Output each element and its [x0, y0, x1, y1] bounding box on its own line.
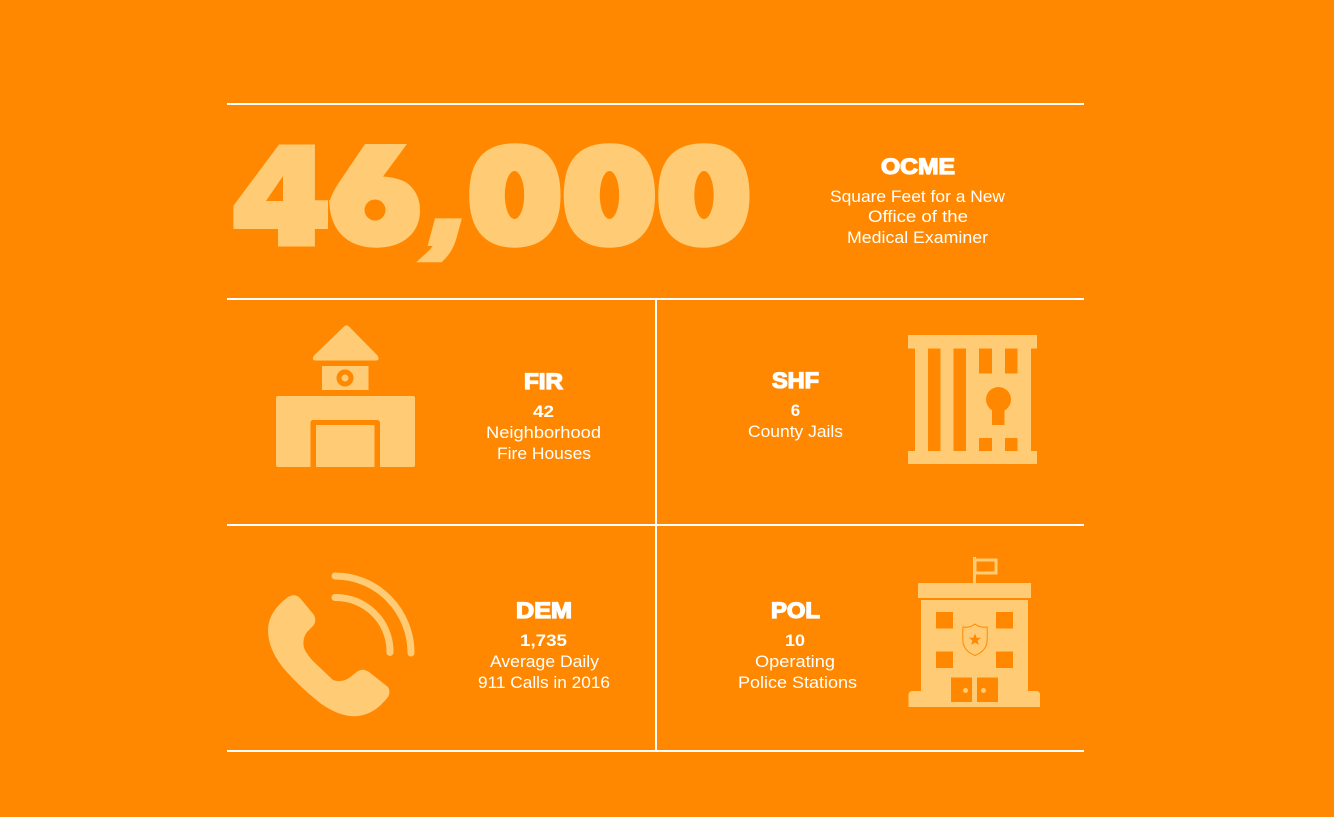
text block: DEM [478, 598, 610, 692]
text block: POL: POL [771, 598, 820, 623]
text block: SHF: County Jails [748, 422, 843, 441]
text block: OCME: OCME [881, 154, 955, 179]
text block: DEM: DEM [516, 598, 572, 623]
big number: 46,000: 0 [567, 126, 652, 266]
text block: OCME: Square Feet for a New [830, 187, 1006, 206]
text block: SHF: 6 [791, 401, 800, 420]
icon: jail cell door [908, 335, 1037, 464]
text block: OCME: Medical Examiner [847, 228, 988, 247]
text block: SHF [748, 368, 843, 441]
big number: 46,000: 0 [473, 126, 557, 266]
text block: FIR: Neighborhood [486, 423, 601, 442]
text block: SHF: SHF [772, 368, 819, 393]
text block: POL: Operating [755, 652, 835, 671]
text block: DEM: 1,735 [520, 631, 567, 650]
text block: POL [738, 598, 857, 692]
text block: DEM: 911 Calls in 2016 [478, 673, 610, 692]
text block: POL: Police Stations [738, 673, 857, 692]
text block: DEM: Average Daily [490, 652, 600, 671]
big number: 46,000: 4 [240, 127, 320, 266]
text block: OCME [830, 154, 1006, 247]
text block: FIR: 42 [533, 402, 554, 421]
text block: FIR [486, 369, 601, 463]
icon: police station [908, 557, 1040, 707]
text block: POL: 10 [785, 631, 805, 650]
big number: 46,000: , [422, 145, 483, 263]
text block: FIR: Fire Houses [497, 444, 591, 463]
icon: telephone with signal arcs [268, 576, 411, 716]
big number: 46,000: 6 [333, 127, 416, 266]
big number: 46,000 [240, 126, 746, 266]
icon: fire house [276, 325, 415, 467]
big number: 46,000: 0 [662, 126, 746, 266]
text block: OCME: Office of the [868, 207, 968, 226]
text block: FIR: FIR [524, 369, 563, 394]
